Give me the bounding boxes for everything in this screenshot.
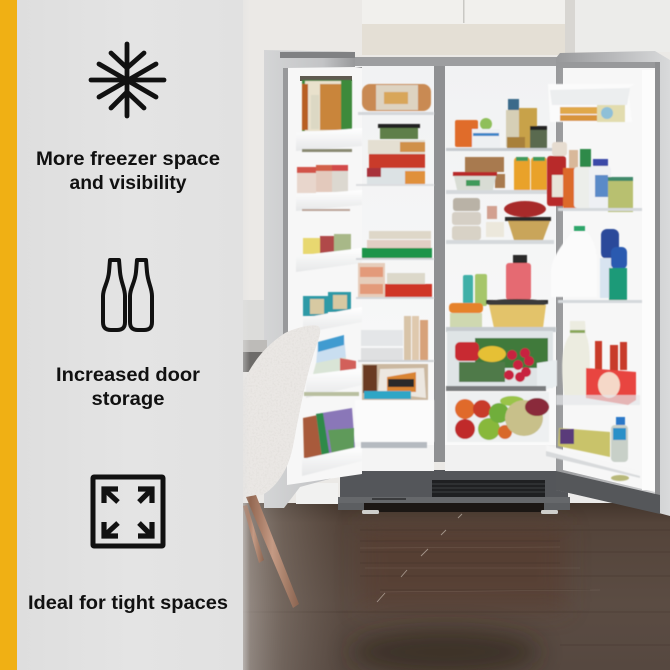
- left freezer door: [264, 50, 362, 508]
- right fridge door: [556, 51, 670, 516]
- heading: more freezer space: More freezer space: [36, 148, 220, 170]
- green boxes: [362, 231, 432, 258]
- white floor gaps under doors: [296, 483, 624, 504]
- icon: two bottles: [103, 260, 152, 330]
- chair front leg: [246, 495, 299, 608]
- chair rear leg: [243, 505, 264, 563]
- shelf 5: [306, 368, 362, 398]
- cabinet top frame: [350, 57, 565, 66]
- freezer bin front: [355, 400, 434, 442]
- bin 4: blue boxes: [303, 292, 351, 316]
- green container: [378, 124, 420, 139]
- refrigerator: [264, 50, 670, 516]
- upper shelf items: [455, 99, 547, 148]
- mid boxes: [358, 263, 432, 297]
- shelf 1 bread: [358, 84, 434, 115]
- bin 2: pouches: [297, 165, 348, 193]
- chair back and seat: [243, 325, 320, 497]
- produce crisper: [447, 331, 557, 392]
- heading: ideal for tight spaces: Ideal for tight spaces: [28, 592, 228, 614]
- refrigerator compartment: [445, 66, 560, 471]
- refrigerator shelves with food: [446, 99, 557, 442]
- icon: expand arrows in square: [93, 477, 163, 546]
- bin 5: packages: [312, 335, 356, 378]
- shelf 3: [296, 248, 362, 272]
- milk jug and blue bottles: [551, 226, 627, 302]
- dairy bin: [548, 84, 635, 122]
- freezer shelves with food: [355, 84, 434, 448]
- shelf 1: [296, 128, 362, 151]
- heading: increased door: Increased door: [56, 364, 200, 386]
- lower door bin items: [558, 417, 628, 462]
- center divider: [434, 66, 445, 462]
- bin 3: small boxes: [303, 234, 351, 254]
- freezer compartment: [355, 66, 434, 471]
- shelf 2: [296, 190, 362, 211]
- background curtain behind chair: [243, 300, 264, 342]
- stacked frozen boxes: [367, 140, 425, 184]
- right door bins with food: [546, 84, 642, 481]
- fridge base and toe grille: [338, 470, 570, 514]
- shelf 6: [302, 446, 362, 476]
- lower shelf bottles and jar: [449, 255, 548, 328]
- feature: freezer space: [36, 44, 220, 194]
- wood floor: [243, 503, 670, 670]
- lower door shelf: [546, 445, 640, 478]
- icon: snowflake: [91, 44, 164, 116]
- milk bottle and soda carton: [562, 321, 636, 405]
- chair and table: [243, 300, 320, 608]
- bin 6: frozen vegetables: [303, 408, 355, 458]
- shelf 4: [303, 307, 362, 333]
- bin 1: frozen box: [302, 80, 352, 131]
- white and tan boxes: [361, 316, 428, 360]
- freezer door bins with food: [296, 80, 362, 476]
- left grey panel: [17, 0, 250, 670]
- yellow edge bar: [0, 0, 17, 670]
- condiments: [547, 142, 633, 212]
- second shelf items: [453, 157, 547, 194]
- feature: tight spaces: [28, 477, 228, 614]
- table edge: [243, 340, 267, 352]
- heading: and visibility: and visibility: [70, 172, 187, 194]
- freezer basket contents: [362, 364, 428, 400]
- kitchen wall background: [243, 0, 670, 510]
- upper cabinets: [362, 0, 670, 55]
- feature: door storage: [56, 260, 200, 410]
- third shelf items: [452, 198, 551, 240]
- heading: storage: storage: [92, 388, 165, 410]
- fruit crisper: [447, 392, 549, 442]
